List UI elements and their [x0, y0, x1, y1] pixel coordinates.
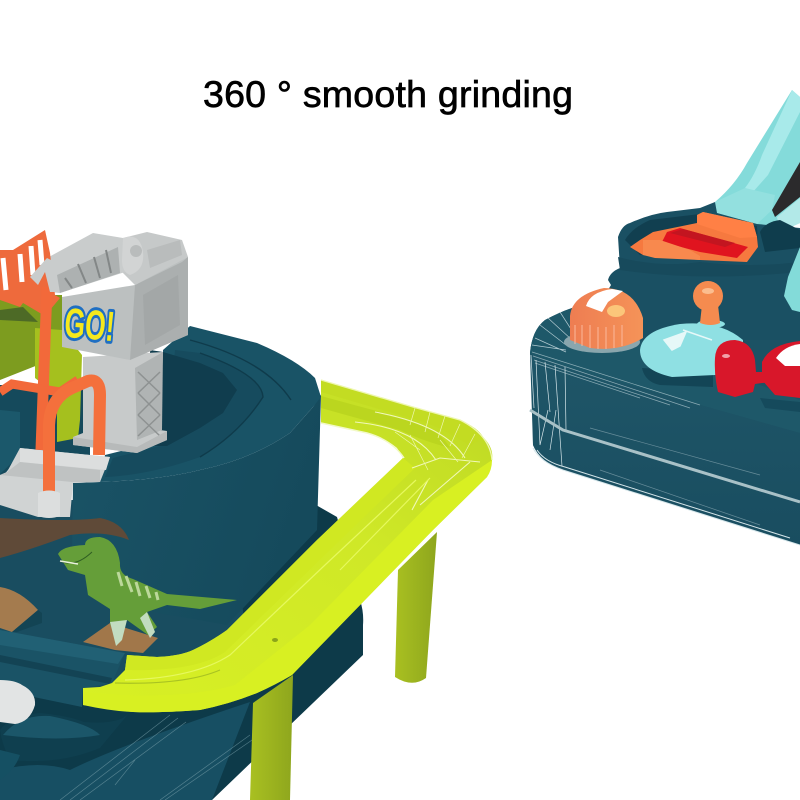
crossbar: [0, 380, 78, 392]
red button: [760, 341, 800, 412]
post cap: [38, 490, 60, 518]
red lever: [715, 340, 770, 397]
orange railing: [0, 230, 60, 316]
base front wall: [532, 353, 800, 545]
crane claw collar: [30, 258, 55, 292]
back claw post: [41, 287, 47, 450]
floor of play area: [0, 500, 250, 690]
teal block left of crane: [0, 385, 90, 480]
crane head: [62, 257, 188, 360]
track groove lines: [190, 340, 291, 457]
upper curved track rim: [100, 326, 321, 482]
lower base tier: [0, 505, 363, 800]
green block behind crane: [0, 295, 82, 442]
teal side block: [0, 410, 20, 474]
yellow-green rail: [83, 380, 492, 712]
upper dais: [608, 202, 800, 340]
dirt mound left: [0, 587, 38, 632]
title: 360 ° smooth grinding: [203, 73, 573, 115]
dirt mound under green dinosaur: [83, 623, 158, 653]
crane tower: [30, 232, 188, 453]
stone steps: [0, 448, 110, 517]
floor ledge: [0, 630, 125, 707]
base top surface: [530, 308, 800, 433]
teal tower wall: [72, 395, 321, 625]
green dinosaur: [58, 537, 237, 646]
track rim ridge: [105, 350, 263, 477]
right post of arch: [49, 381, 100, 492]
base body: [530, 270, 800, 545]
crane boom: [30, 233, 125, 293]
aqua side panel: [784, 247, 800, 312]
right toy: control panel playset: [530, 90, 800, 545]
back rail leg: [395, 532, 437, 683]
left toy: dinosaur track playset: [0, 230, 492, 800]
orange globe knob: [564, 288, 643, 353]
small ledge: [12, 610, 42, 632]
base highlight stripe: [530, 410, 800, 502]
orange seat: [630, 212, 758, 262]
slide: [715, 90, 800, 232]
wireframe mesh: [531, 312, 800, 545]
GO! badge: GO!: [63, 299, 117, 350]
front rail leg: [250, 675, 293, 800]
pit inside the tower: [150, 350, 237, 446]
aqua joystick disc: [640, 281, 743, 387]
brown dinosaur tail: [0, 518, 129, 558]
white cylinder: [0, 680, 35, 724]
joystick handle: [693, 281, 725, 328]
